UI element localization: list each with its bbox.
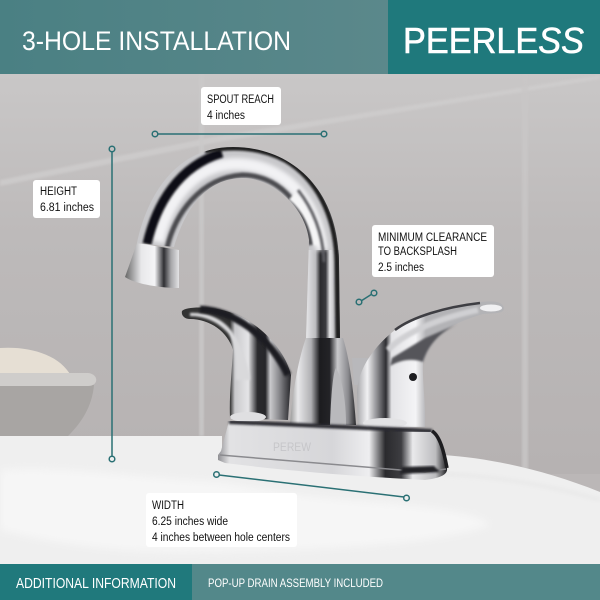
left handle <box>182 307 291 422</box>
spout nozzle <box>125 243 179 288</box>
dimension line: clearance <box>356 290 377 305</box>
title: 3-HOLE INSTALLATION <box>22 26 291 56</box>
footer: additional information text: POP-UP DRAIN ASSEMBLY INCLUDED <box>208 578 383 590</box>
callout: minimum clearance: 2.5 inches <box>378 262 424 274</box>
header bar <box>0 0 388 74</box>
callout: width: 6.25 inches wide <box>152 516 228 528</box>
handle set-screw <box>409 373 417 381</box>
callout: minimum clearance: MINIMUM CLEARANCE <box>378 232 487 244</box>
callout: minimum clearance: TO BACKSPLASH <box>378 246 457 258</box>
brand logo panel <box>388 0 600 74</box>
callout: spout reach: 4 inches <box>207 110 245 122</box>
dimension line: spout reach <box>152 131 327 137</box>
soap dish with soap <box>0 348 96 436</box>
footer: additional information label <box>0 564 192 600</box>
callout: spout reach: SPOUT REACH <box>207 94 274 106</box>
rear knob <box>352 358 369 385</box>
callout: width <box>146 493 297 547</box>
right handle <box>357 301 504 428</box>
callout: width: WIDTH <box>152 500 184 512</box>
callout: height: 6.81 inches <box>40 202 94 214</box>
centre body <box>290 338 356 425</box>
spout <box>137 147 340 338</box>
callout: height: HEIGHT <box>40 186 77 198</box>
background photo: tiled wall <box>0 74 600 474</box>
faucet <box>125 140 504 480</box>
brand logo panel: PEERLESS <box>403 20 584 61</box>
sink basin <box>0 436 600 564</box>
deck plate: PEREW <box>273 440 312 454</box>
callout: spout reach <box>201 87 281 125</box>
dimension line: width <box>214 472 409 501</box>
callout: width: 4 inches between hole centers <box>152 532 290 544</box>
deck plate <box>218 421 447 480</box>
callout: minimum clearance <box>372 225 494 277</box>
footer: additional information label: ADDITIONAL INFORMATION <box>16 576 176 592</box>
footer: additional information text <box>192 564 600 600</box>
callout: height <box>33 180 100 218</box>
dimension line: height <box>109 146 115 462</box>
